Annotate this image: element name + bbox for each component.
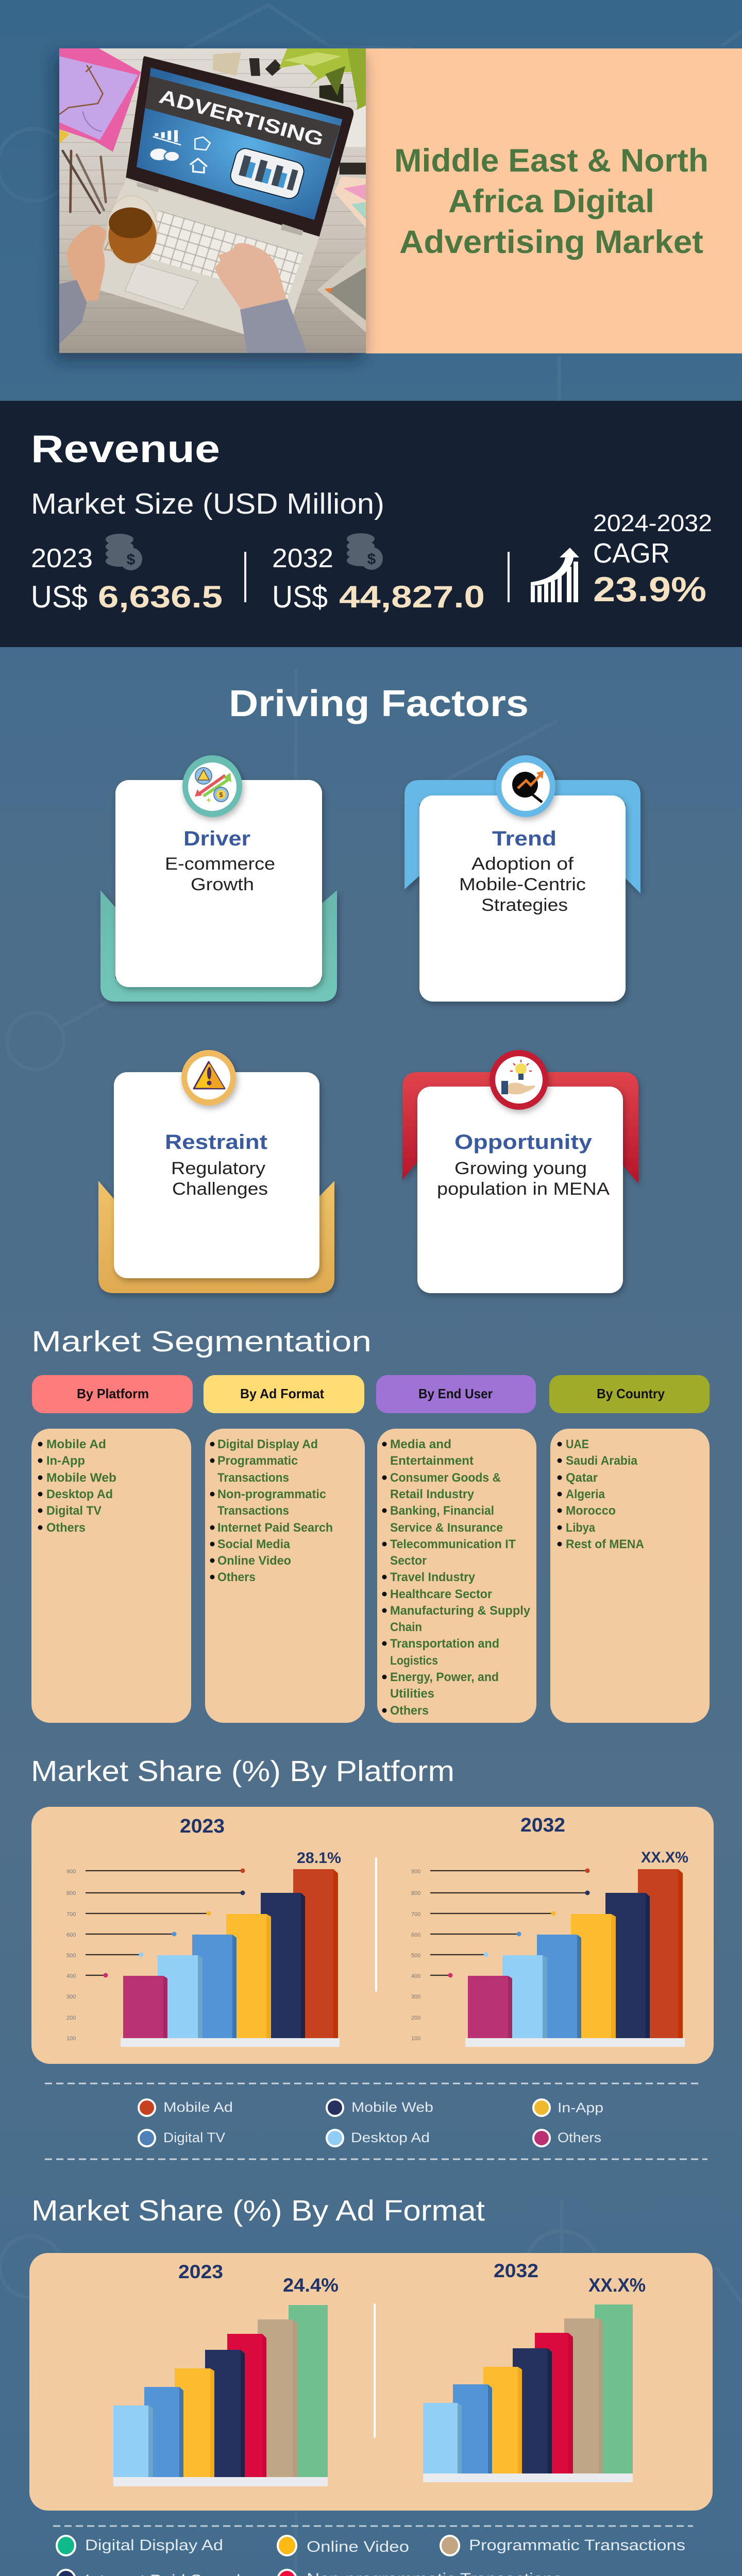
chart: platform 2023: 400 bbox=[66, 1973, 76, 1979]
list: ad format: Online Video bbox=[217, 1554, 291, 1568]
hero title bbox=[394, 143, 709, 260]
list: end user: Travel Industry bbox=[390, 1570, 476, 1584]
list: end user: Retail Industry bbox=[390, 1487, 475, 1501]
header pill: by ad format: By Ad Format bbox=[240, 1386, 324, 1401]
2023 value bbox=[31, 544, 223, 614]
list: ad format: Internet Paid Search bbox=[217, 1521, 333, 1535]
opportunity text bbox=[437, 1131, 610, 1199]
list: country: Morocco bbox=[566, 1504, 616, 1518]
screen icons bbox=[151, 130, 210, 173]
CAGR block: CAGR bbox=[593, 538, 670, 569]
chart: platform 2032 bbox=[411, 1815, 688, 2047]
list: ad format: Transactions bbox=[217, 1471, 289, 1485]
chart: platform 2023: 100 bbox=[66, 2036, 76, 2042]
icon: trend bbox=[496, 755, 555, 817]
list: platform: Mobile Web bbox=[46, 1471, 116, 1485]
hero title panel bbox=[366, 48, 742, 353]
screen chart box bbox=[228, 146, 306, 201]
2023 value: 2023 bbox=[31, 544, 93, 573]
hero photo: laptop on desk bbox=[59, 48, 366, 353]
chart: platform 2032: 900 bbox=[411, 1869, 420, 1875]
list: end user: Entertainment bbox=[390, 1454, 474, 1468]
segmentation: by platform bbox=[31, 1375, 193, 1723]
list: platform: Mobile Ad bbox=[46, 1437, 106, 1451]
header pill: by end user bbox=[376, 1375, 536, 1413]
driver text bbox=[165, 827, 275, 894]
legend: ad format: Programmatic Transactions bbox=[469, 2537, 685, 2554]
header pill: by platform: By Platform bbox=[77, 1386, 149, 1401]
driver text: Driver bbox=[183, 827, 250, 850]
driver text: E-commerce bbox=[165, 854, 275, 874]
list: country: Libya bbox=[566, 1521, 596, 1535]
icon: driver: + bbox=[206, 796, 211, 805]
restraint text: Challenges bbox=[172, 1179, 268, 1199]
legend: ad format: Digital Display Ad bbox=[85, 2537, 223, 2554]
heading: driving factors: Driving Factors bbox=[229, 683, 529, 724]
trend text: Strategies bbox=[481, 895, 568, 915]
chart: platform 2023: 800 bbox=[66, 1890, 76, 1896]
CAGR block: 23.9% bbox=[593, 570, 706, 609]
chart: ad format 2032: 2032 bbox=[494, 2260, 538, 2281]
chart: platform 2023: 900 bbox=[66, 1869, 76, 1875]
hero banner bbox=[59, 48, 742, 353]
legend: platform: In-App bbox=[558, 2100, 603, 2115]
chart: platform 2023: 500 bbox=[66, 1953, 76, 1959]
list: ad format: Transactions bbox=[217, 1504, 289, 1518]
list: country bbox=[550, 1429, 710, 1723]
legend: platform bbox=[139, 2099, 603, 2146]
list: ad format: Non-programmatic bbox=[217, 1487, 326, 1501]
legend: platform: Digital TV bbox=[163, 2130, 225, 2145]
list: ad format bbox=[205, 1429, 365, 1723]
icon: driver: $ bbox=[219, 791, 223, 799]
chart divider bbox=[374, 2303, 376, 2438]
chart: platform 2023: 700 bbox=[66, 1911, 76, 1918]
segmentation: by end user bbox=[376, 1375, 536, 1723]
chart: platform 2032: 100 bbox=[411, 2036, 420, 2042]
icon: restraint bbox=[181, 1050, 236, 1106]
legend: platform: Others bbox=[558, 2130, 601, 2145]
trend text bbox=[459, 827, 586, 915]
panel: market share by platform bbox=[31, 1807, 714, 2064]
heading: market share by platform: Market Share (%) By Platform bbox=[31, 1755, 454, 1788]
list: end user: Utilities bbox=[390, 1687, 434, 1701]
list: ad format: Programmatic bbox=[217, 1454, 298, 1468]
chart: platform 2023: 28.1% bbox=[297, 1850, 341, 1867]
list: end user: Media and bbox=[390, 1437, 451, 1451]
list: end user: Logistics bbox=[390, 1654, 438, 1668]
list: platform bbox=[31, 1429, 191, 1723]
chart: ad format 2032: XX.X% bbox=[588, 2275, 646, 2296]
icon: coins 2023: $ bbox=[127, 551, 136, 568]
chart: ad format 2032 bbox=[423, 2260, 646, 2482]
panel: opportunity bbox=[402, 1050, 638, 1293]
list: platform: Others bbox=[46, 1521, 86, 1535]
segmentation: by ad format bbox=[204, 1375, 365, 1723]
list: end user: Sector bbox=[390, 1554, 427, 1568]
trend text: Mobile-Centric bbox=[459, 875, 586, 894]
opportunity text: Growing young bbox=[454, 1159, 587, 1178]
opportunity text: Opportunity bbox=[454, 1131, 593, 1154]
chart: platform 2032: 500 bbox=[411, 1953, 420, 1959]
market size label: Market Size (USD Million) bbox=[31, 487, 384, 520]
list: platform: Digital TV bbox=[46, 1504, 102, 1518]
chart: platform 2032: 400 bbox=[411, 1973, 420, 1979]
screen headline: ADVERTISING bbox=[157, 86, 326, 151]
opportunity text: population in MENA bbox=[437, 1179, 610, 1199]
icon: coins 2023 bbox=[106, 534, 142, 570]
header pill: by country bbox=[549, 1375, 710, 1413]
hero title: Middle East & North bbox=[394, 143, 709, 179]
list: country: Saudi Arabia bbox=[566, 1454, 638, 1468]
chart: platform 2032: 2032 bbox=[520, 1815, 565, 1836]
list: end user: Manufacturing & Supply bbox=[390, 1604, 531, 1618]
restraint text: Regulatory bbox=[171, 1159, 265, 1178]
header pill: by platform bbox=[32, 1375, 193, 1413]
chart: platform 2023: 600 bbox=[66, 1932, 76, 1938]
list: ad format: Social Media bbox=[217, 1537, 291, 1551]
chart: ad format 2023: 24.4% bbox=[283, 2275, 339, 2296]
revenue band bbox=[0, 401, 742, 647]
icon: coins 2032: $ bbox=[367, 551, 376, 568]
panel: trend bbox=[404, 755, 640, 1002]
panel: driver bbox=[100, 755, 337, 1002]
icon: opportunity bbox=[490, 1050, 548, 1110]
header pill: by ad format bbox=[204, 1375, 364, 1413]
list: end user: Banking, Financial bbox=[390, 1504, 494, 1518]
header pill: by end user: By End User bbox=[418, 1386, 493, 1401]
icon: driver bbox=[182, 755, 242, 817]
header pill: by country: By Country bbox=[597, 1386, 665, 1401]
list: end user: Energy, Power, and bbox=[390, 1670, 499, 1684]
list: end user: Others bbox=[390, 1704, 429, 1718]
heading: market share by ad format: Market Share (%) By Ad Format bbox=[31, 2194, 485, 2227]
CAGR block bbox=[593, 510, 712, 609]
chart: platform 2023: 300 bbox=[66, 1994, 76, 2000]
list: country: UAE bbox=[566, 1437, 589, 1451]
list: end user: Telecommunication IT bbox=[390, 1537, 516, 1551]
list: end user: Service & Insurance bbox=[390, 1521, 503, 1535]
list: platform: Desktop Ad bbox=[46, 1487, 113, 1501]
chart: platform 2023: 2023 bbox=[180, 1816, 225, 1837]
legend: platform: Desktop Ad bbox=[351, 2130, 430, 2145]
list: ad format: Digital Display Ad bbox=[217, 1437, 318, 1451]
2032 value bbox=[272, 544, 485, 614]
CAGR block: 2024-2032 bbox=[593, 510, 712, 536]
trend text: Trend bbox=[492, 827, 556, 850]
chart: platform 2032: 200 bbox=[411, 2015, 420, 2021]
legend: platform: Mobile Ad bbox=[163, 2099, 233, 2115]
list: end user: Healthcare Sector bbox=[390, 1587, 492, 1601]
restraint text: Restraint bbox=[165, 1131, 267, 1154]
segmentation: by country bbox=[549, 1375, 710, 1723]
list: ad format: Others bbox=[217, 1570, 256, 1584]
chart: ad format 2023: 2023 bbox=[178, 2261, 223, 2282]
2023 value: 6,636.5 bbox=[98, 580, 223, 614]
2032 value: 2032 bbox=[272, 544, 333, 573]
chart: platform 2023: 200 bbox=[66, 2015, 76, 2021]
list: platform: In-App bbox=[46, 1454, 85, 1468]
restraint text bbox=[165, 1131, 268, 1199]
chart: ad format 2023 bbox=[113, 2261, 339, 2486]
trend text: Adoption of bbox=[471, 854, 574, 874]
list: country: Qatar bbox=[566, 1471, 598, 1485]
panel: restraint bbox=[98, 1050, 334, 1293]
2023 value: US$ bbox=[31, 580, 88, 614]
hero title: Africa Digital bbox=[448, 183, 654, 219]
legend: ad format bbox=[56, 2536, 685, 2576]
chart: platform 2032: XX.X% bbox=[641, 1849, 688, 1866]
list: end user: Transportation and bbox=[390, 1637, 499, 1651]
driver text: Growth bbox=[191, 875, 254, 894]
legend: ad format: Online Video bbox=[307, 2538, 409, 2555]
heading: market segmentation: Market Segmentation bbox=[31, 1325, 372, 1358]
legend: platform: Mobile Web bbox=[351, 2099, 433, 2115]
list: country: Algeria bbox=[566, 1487, 605, 1501]
2032 value: 44,827.0 bbox=[339, 580, 485, 614]
hero title: Advertising Market bbox=[399, 224, 703, 260]
chart: platform 2032: 700 bbox=[411, 1911, 420, 1918]
chart: platform 2023 bbox=[66, 1816, 341, 2047]
icon: growth arrow bbox=[531, 548, 579, 602]
2032 value: US$ bbox=[272, 580, 328, 614]
chart: platform 2032: 600 bbox=[411, 1932, 420, 1938]
list: end user: Consumer Goods & bbox=[390, 1471, 501, 1485]
icon: coins 2032 bbox=[347, 533, 383, 570]
chart: platform 2032: 800 bbox=[411, 1890, 420, 1896]
list: end user bbox=[377, 1429, 536, 1723]
divider bbox=[508, 552, 510, 602]
chart: platform 2032: 300 bbox=[411, 1994, 420, 2000]
divider bbox=[244, 552, 246, 602]
chart divider bbox=[375, 1857, 377, 1992]
revenue heading: Revenue bbox=[31, 427, 220, 470]
list: country: Rest of MENA bbox=[566, 1537, 644, 1551]
list: end user: Chain bbox=[390, 1620, 422, 1634]
panel: market share by ad format bbox=[29, 2253, 713, 2511]
